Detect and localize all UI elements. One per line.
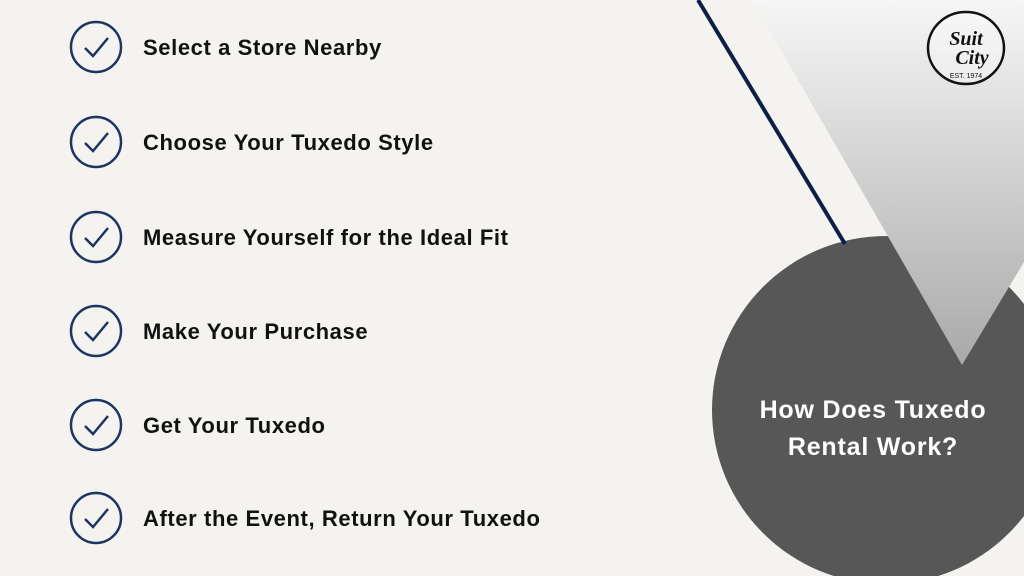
- step 1: [70, 20, 382, 74]
- step 2: [70, 116, 434, 168]
- logo: Suit: [949, 28, 984, 50]
- step 2: Choose Your Tuxedo Style: [143, 130, 434, 155]
- logo: EST. 1974: [950, 73, 982, 80]
- step 4: [70, 304, 368, 358]
- step 5: [70, 398, 326, 452]
- dark circle: [712, 236, 1024, 576]
- step 3: Measure Yourself for the Ideal Fit: [143, 225, 509, 250]
- gradient triangle: [752, 0, 1024, 365]
- step 1: Select a Store Nearby: [143, 35, 382, 60]
- step 4: Make Your Purchase: [143, 319, 368, 344]
- title: Rental Work?: [788, 433, 958, 461]
- title: How Does Tuxedo: [760, 396, 986, 424]
- title: [760, 396, 986, 461]
- step 6: After the Event, Return Your Tuxedo: [143, 506, 540, 531]
- navy diagonal line: [698, 0, 845, 244]
- logo: City: [955, 47, 989, 69]
- logo: [926, 10, 1006, 86]
- step 3: [70, 210, 509, 264]
- step 6: [70, 492, 540, 544]
- step 5: Get Your Tuxedo: [143, 413, 326, 438]
